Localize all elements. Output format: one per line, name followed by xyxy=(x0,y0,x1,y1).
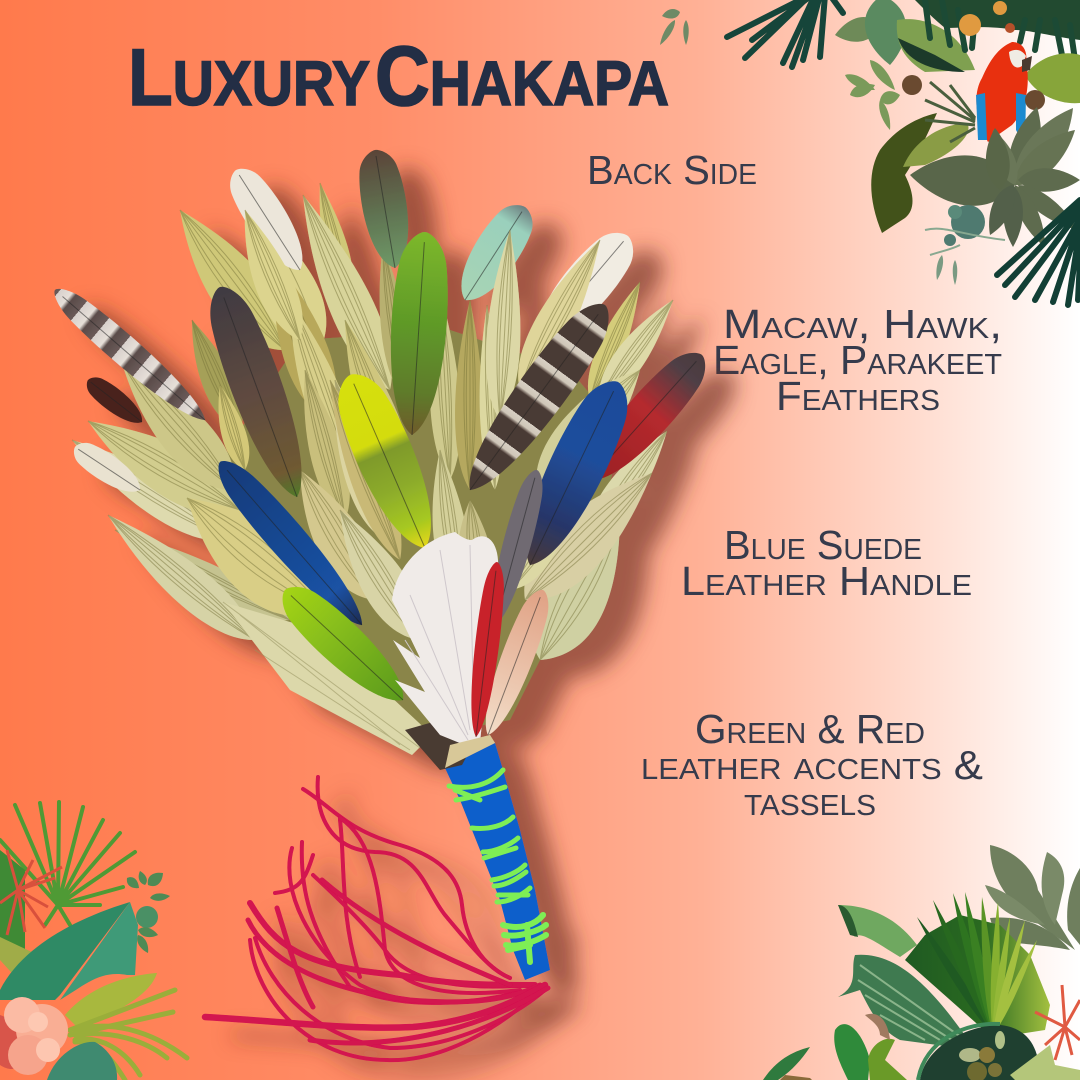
feather: yellow green xyxy=(324,364,451,559)
text: back side label: Back Side xyxy=(587,147,757,193)
peach flower xyxy=(0,997,68,1075)
text block: feathers: Macaw, Hawk, xyxy=(723,301,1002,347)
feather: grey xyxy=(482,466,550,629)
feather: lime xyxy=(270,574,418,716)
side leaf xyxy=(838,905,917,957)
fern and broad leaves xyxy=(833,0,975,72)
monstera xyxy=(985,845,1080,950)
palm fan xyxy=(0,802,135,925)
feather: top right white xyxy=(522,220,646,356)
husk mass xyxy=(61,180,684,755)
feather base tuft xyxy=(405,720,478,770)
husk over teal xyxy=(482,229,526,421)
teal fan xyxy=(47,1042,117,1080)
foliage cluster xyxy=(925,205,1005,285)
text block: feathers: Eagle, Parakeet xyxy=(713,337,1002,383)
banana shapes xyxy=(834,1024,870,1080)
handle xyxy=(445,743,550,980)
text block: handle: Blue Suede xyxy=(724,522,922,568)
right monstera xyxy=(1025,53,1080,103)
grey monstera xyxy=(908,98,1080,251)
olive fan xyxy=(0,937,55,982)
chakapa feather fan xyxy=(46,146,719,1060)
feather: white left xyxy=(67,436,148,501)
feather: striped left xyxy=(46,279,214,431)
plants: bottom right xyxy=(763,845,1080,1080)
feather: teal xyxy=(446,195,544,312)
husk over white xyxy=(503,231,616,398)
feather: white fan xyxy=(392,532,498,748)
quill base xyxy=(445,735,495,768)
light fan xyxy=(1010,1045,1080,1080)
husk over top white xyxy=(228,204,315,347)
lower palm xyxy=(65,973,157,1030)
text block: accents: Green & Red xyxy=(695,706,925,752)
feather: dark red small xyxy=(81,371,149,431)
feather: striped right xyxy=(451,291,624,504)
sprig xyxy=(124,868,171,955)
text block: accents xyxy=(641,706,983,824)
red spikes xyxy=(0,850,62,935)
feather: peach xyxy=(473,584,558,741)
dense canopy xyxy=(915,0,1080,60)
plants: top right xyxy=(657,0,1080,305)
plants: bottom left xyxy=(0,802,187,1080)
palm behind parrot xyxy=(925,82,975,142)
red spikes xyxy=(1035,985,1080,1060)
sprigs xyxy=(843,56,922,131)
fruit cluster xyxy=(959,1031,1005,1080)
feather: green large xyxy=(384,230,453,437)
title xyxy=(128,29,669,123)
feather: red and dark xyxy=(573,340,719,495)
text block: feathers xyxy=(713,301,1002,419)
text block: accents: leather accents & xyxy=(641,742,983,788)
dark palm top xyxy=(727,0,843,67)
dark palm lower xyxy=(997,200,1080,305)
bottom dark mass xyxy=(920,1025,1040,1080)
feather: top white xyxy=(219,160,317,280)
parrot xyxy=(976,42,1045,147)
palm fan xyxy=(905,891,1050,1038)
title: CHAKAPA xyxy=(375,29,669,123)
big dark leaf xyxy=(871,113,937,233)
text block: feathers: Feathers xyxy=(776,373,940,419)
big teal leaf xyxy=(0,902,130,1000)
title: LUXURY xyxy=(128,33,370,123)
feather: top brown xyxy=(353,146,417,272)
sprig left xyxy=(657,7,689,47)
lower striped fan xyxy=(838,955,975,1050)
text block: handle: Leather Handle xyxy=(681,558,972,604)
feather: blue right xyxy=(505,370,643,577)
feather: red xyxy=(464,561,509,738)
light olive leaf xyxy=(903,123,969,167)
text block: accents: tassels xyxy=(744,778,876,824)
feather: dark with green base xyxy=(196,278,321,506)
feather: blue left xyxy=(206,450,376,637)
tassels xyxy=(205,777,548,1060)
text block: handle xyxy=(681,522,972,604)
